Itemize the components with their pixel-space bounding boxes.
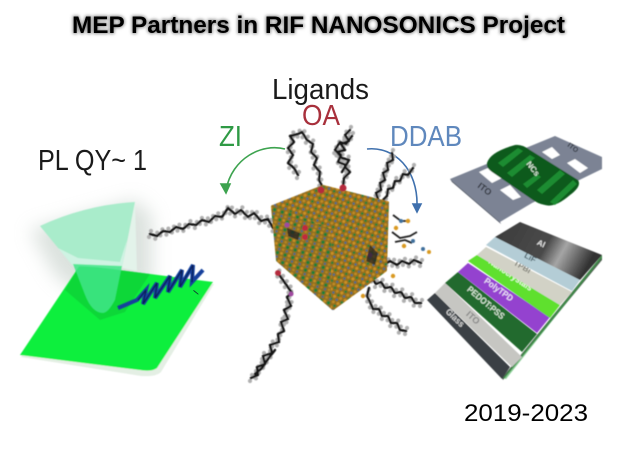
ligand chains [149,127,422,381]
layer: Glass: Glass [444,306,467,329]
ITO labels: ITO [476,181,494,198]
layer: Al: Al [536,238,547,250]
layer: TPBi: TPBi [512,258,532,275]
panel: photoluminescence film [20,200,214,376]
DDAB clusters [361,215,431,298]
soft glow behind cone [30,200,152,315]
panel: ITO device top view: ITO [566,142,580,155]
label: OA: OA [302,100,341,132]
label: Ligands: Ligands [272,74,369,106]
label: PL QY: PL QY~ 1 [38,145,147,177]
panel: LED layer stack [427,222,602,380]
layer: LiF: LiF [523,251,538,265]
date label: 2019-2023 [464,400,588,427]
label: DDAB: DDAB [390,121,462,153]
title: MEP Partners in RIF NANOSONICS Project [72,12,565,39]
arrow: ZI [221,148,285,193]
layer: Nanocrystals [468,255,560,318]
layer: ITO: ITO [464,309,482,326]
icon: excitation wave [118,265,203,308]
green film [20,265,214,376]
layer: TPBi [477,247,572,305]
layer: Nanocrystals: Nanocrystals [487,256,535,293]
emission cone [40,202,137,313]
layer: PEDOT:PSS: PEDOT:PSS [465,284,507,322]
layer: LiF [486,237,580,291]
label: ZI: ZI [219,121,242,153]
nanocrystal film [487,145,579,206]
nanocrystal cube [273,187,387,308]
layer: Al [495,222,602,280]
electrode stripes [498,148,577,205]
surface head groups [275,184,378,296]
stack side [502,255,602,380]
arrow: DDAB [367,149,421,212]
nanocrystal with ligands [149,127,431,381]
layer: PolyTPD: PolyTPD [482,275,515,303]
panel: ITO device top view [450,136,602,224]
layer: Glass [427,293,510,379]
layer: PolyTPD [458,263,550,333]
layer: ITO [435,283,522,367]
ITO substrate [450,136,602,222]
wave label: I [191,289,201,296]
NCs label: NCs [524,160,542,178]
white gaps [479,147,588,200]
layer: PEDOT:PSS [445,272,537,352]
title: MEP Partners in RIF NANOSONICS Project [72,12,565,39]
